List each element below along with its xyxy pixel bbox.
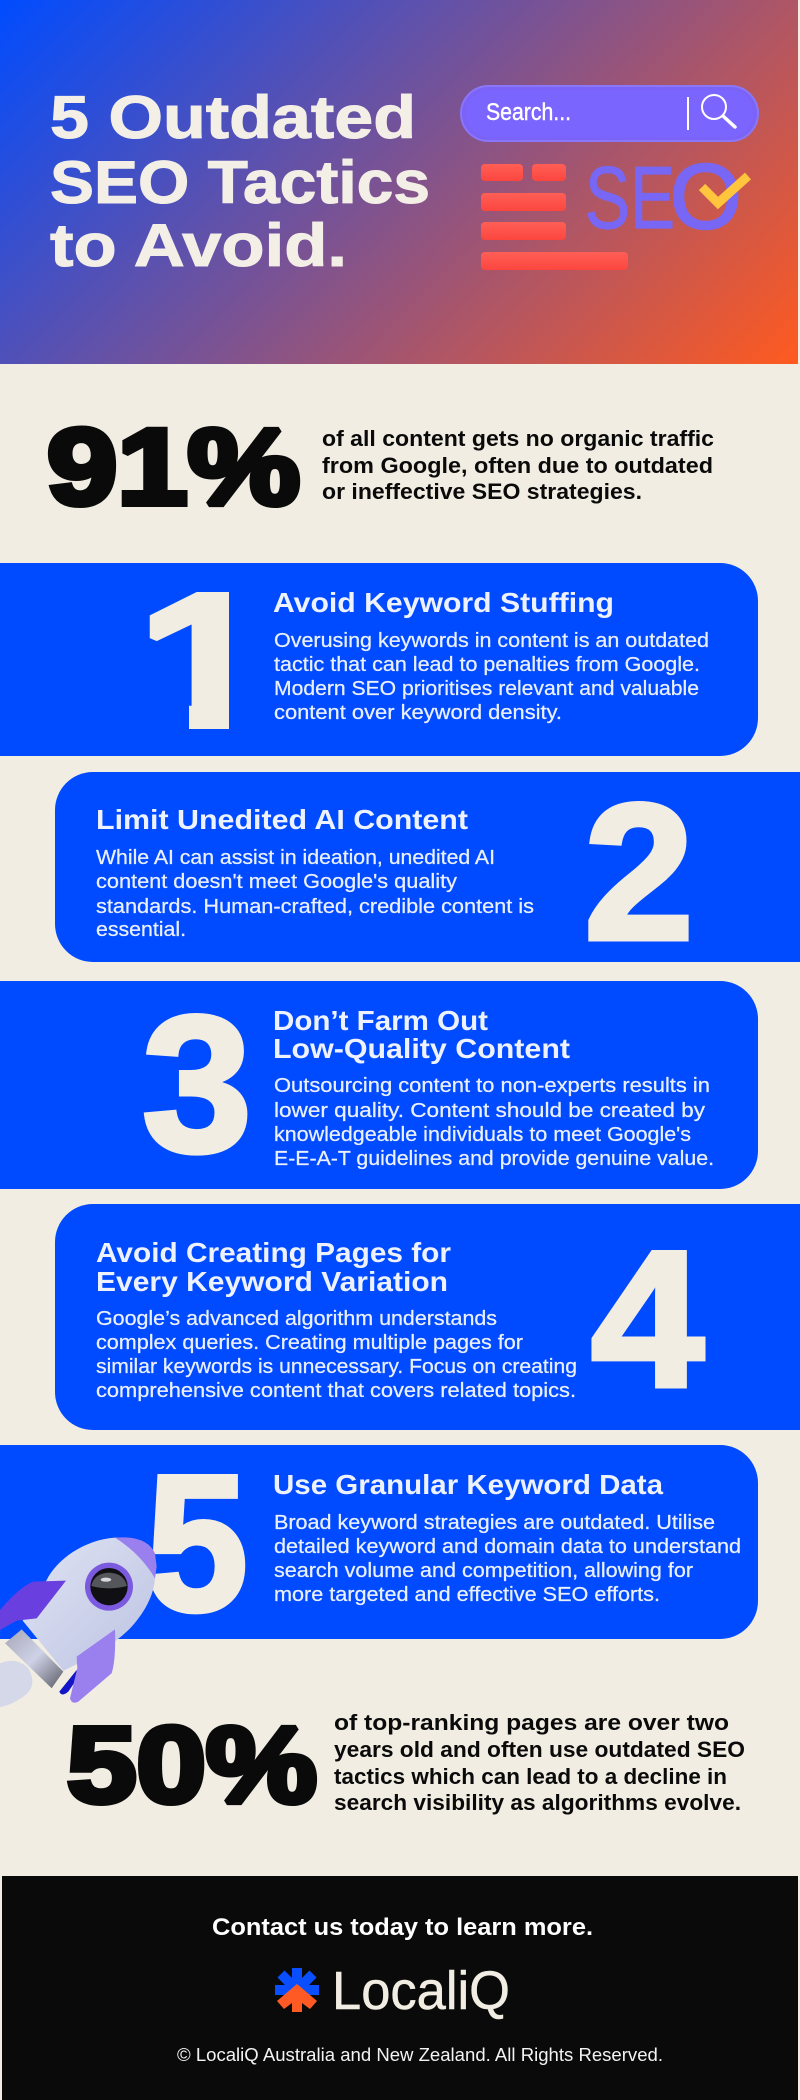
body text: Google’s advanced algorithm understands	[96, 1308, 497, 1330]
body text	[96, 1308, 577, 1402]
number 5: 5	[146, 1435, 248, 1652]
title: SEO Tactics	[50, 149, 430, 216]
header banner	[0, 0, 798, 364]
panel: tactic 1	[0, 563, 758, 756]
title: 5 Outdated	[50, 84, 416, 151]
stat: 91 percent	[47, 406, 714, 527]
body text: Overusing keywords in content is an outdated	[274, 630, 709, 652]
heading: Every Keyword Variation	[96, 1266, 448, 1297]
stat: 50 percent	[67, 1704, 745, 1825]
call to action: Contact us today to learn more.	[212, 1914, 593, 1941]
icon: search bar	[461, 86, 758, 141]
body text: detailed keyword and domain data to understand	[274, 1536, 741, 1558]
stat: 91 percent: or ineffective SEO strategies.	[322, 479, 642, 504]
icon: search bar: Search...	[486, 99, 571, 126]
stat: 50 percent: tactics which can lead to a decline in	[334, 1764, 727, 1789]
heading: Don’t Farm Out	[273, 1005, 488, 1036]
body text	[274, 1075, 714, 1170]
number 2: 2	[584, 764, 694, 981]
stat: 50 percent: search visibility as algorithms evolve.	[334, 1790, 741, 1815]
body text	[274, 1512, 741, 1606]
icon: SEO word with check mark	[585, 146, 748, 248]
footer panel	[2, 1876, 798, 2100]
panel: tactic 2	[55, 764, 800, 981]
copyright: © LocaliQ Australia and New Zealand. All Rights Reserved.	[177, 2045, 663, 2065]
stat: 91 percent: 91%	[47, 406, 300, 527]
heading: Low-Quality Content	[273, 1033, 570, 1064]
number 1: 1	[137, 554, 278, 771]
heading	[273, 1005, 570, 1064]
body text: tactic that can lead to penalties from Google.	[274, 654, 700, 676]
body text: similar keywords is unnecessary. Focus on creating	[96, 1356, 577, 1378]
logo wordmark: LocaliQ	[332, 1961, 510, 2021]
body text	[96, 847, 534, 941]
panel: tactic 3	[0, 976, 758, 1193]
icon: red text bars	[481, 164, 628, 270]
stat: 91 percent: from Google, often due to outdated	[322, 453, 713, 478]
icon: rocket	[0, 1537, 157, 1707]
body text: lower quality. Content should be created by	[274, 1100, 705, 1122]
panel: tactic 4	[55, 1204, 800, 1430]
body text: essential.	[96, 919, 186, 941]
panel: tactic 5	[0, 1435, 758, 1652]
body text	[274, 630, 709, 724]
heading	[96, 1237, 451, 1297]
title: to Avoid.	[50, 212, 347, 279]
body text: more targeted and effective SEO efforts.	[274, 1584, 660, 1606]
heading: Avoid Keyword Stuffing	[273, 587, 614, 618]
body text: content doesn't meet Google's quality	[96, 871, 457, 893]
heading: Use Granular Keyword Data	[273, 1469, 663, 1500]
title	[50, 84, 430, 279]
body text: content over keyword density.	[274, 702, 562, 724]
number 3: 3	[142, 976, 252, 1193]
body text: comprehensive content that covers related topics.	[96, 1380, 576, 1402]
body text: search volume and competition, allowing for	[274, 1560, 693, 1582]
body text: While AI can assist in ideation, unedited AI	[96, 847, 495, 869]
body text: complex queries. Creating multiple pages for	[96, 1332, 523, 1354]
stat: 50 percent: 50%	[67, 1704, 317, 1825]
body text: knowledgeable individuals to meet Google's	[274, 1124, 691, 1146]
stat: 50 percent: years old and often use outdated SEO	[334, 1737, 745, 1762]
stat: 91 percent: of all content gets no organic traffic	[322, 426, 714, 451]
body text: Modern SEO prioritises relevant and valuable	[274, 678, 699, 700]
body text: Broad keyword strategies are outdated. Utilise	[274, 1512, 715, 1534]
body text: Outsourcing content to non-experts results in	[274, 1075, 710, 1097]
number 4: 4	[591, 1211, 704, 1428]
icon: SEO word with check mark: SE	[585, 148, 675, 247]
icon: LocaliQ logo mark	[275, 1968, 319, 2012]
heading: Limit Unedited AI Content	[96, 804, 468, 835]
body text: E-E-A-T guidelines and provide genuine value.	[274, 1148, 714, 1170]
stat: 50 percent: of top-ranking pages are over two	[334, 1710, 729, 1735]
heading: Avoid Creating Pages for	[96, 1237, 451, 1268]
icon: SEO word with check mark: O	[670, 146, 742, 248]
body text: standards. Human-crafted, credible content is	[96, 896, 534, 918]
